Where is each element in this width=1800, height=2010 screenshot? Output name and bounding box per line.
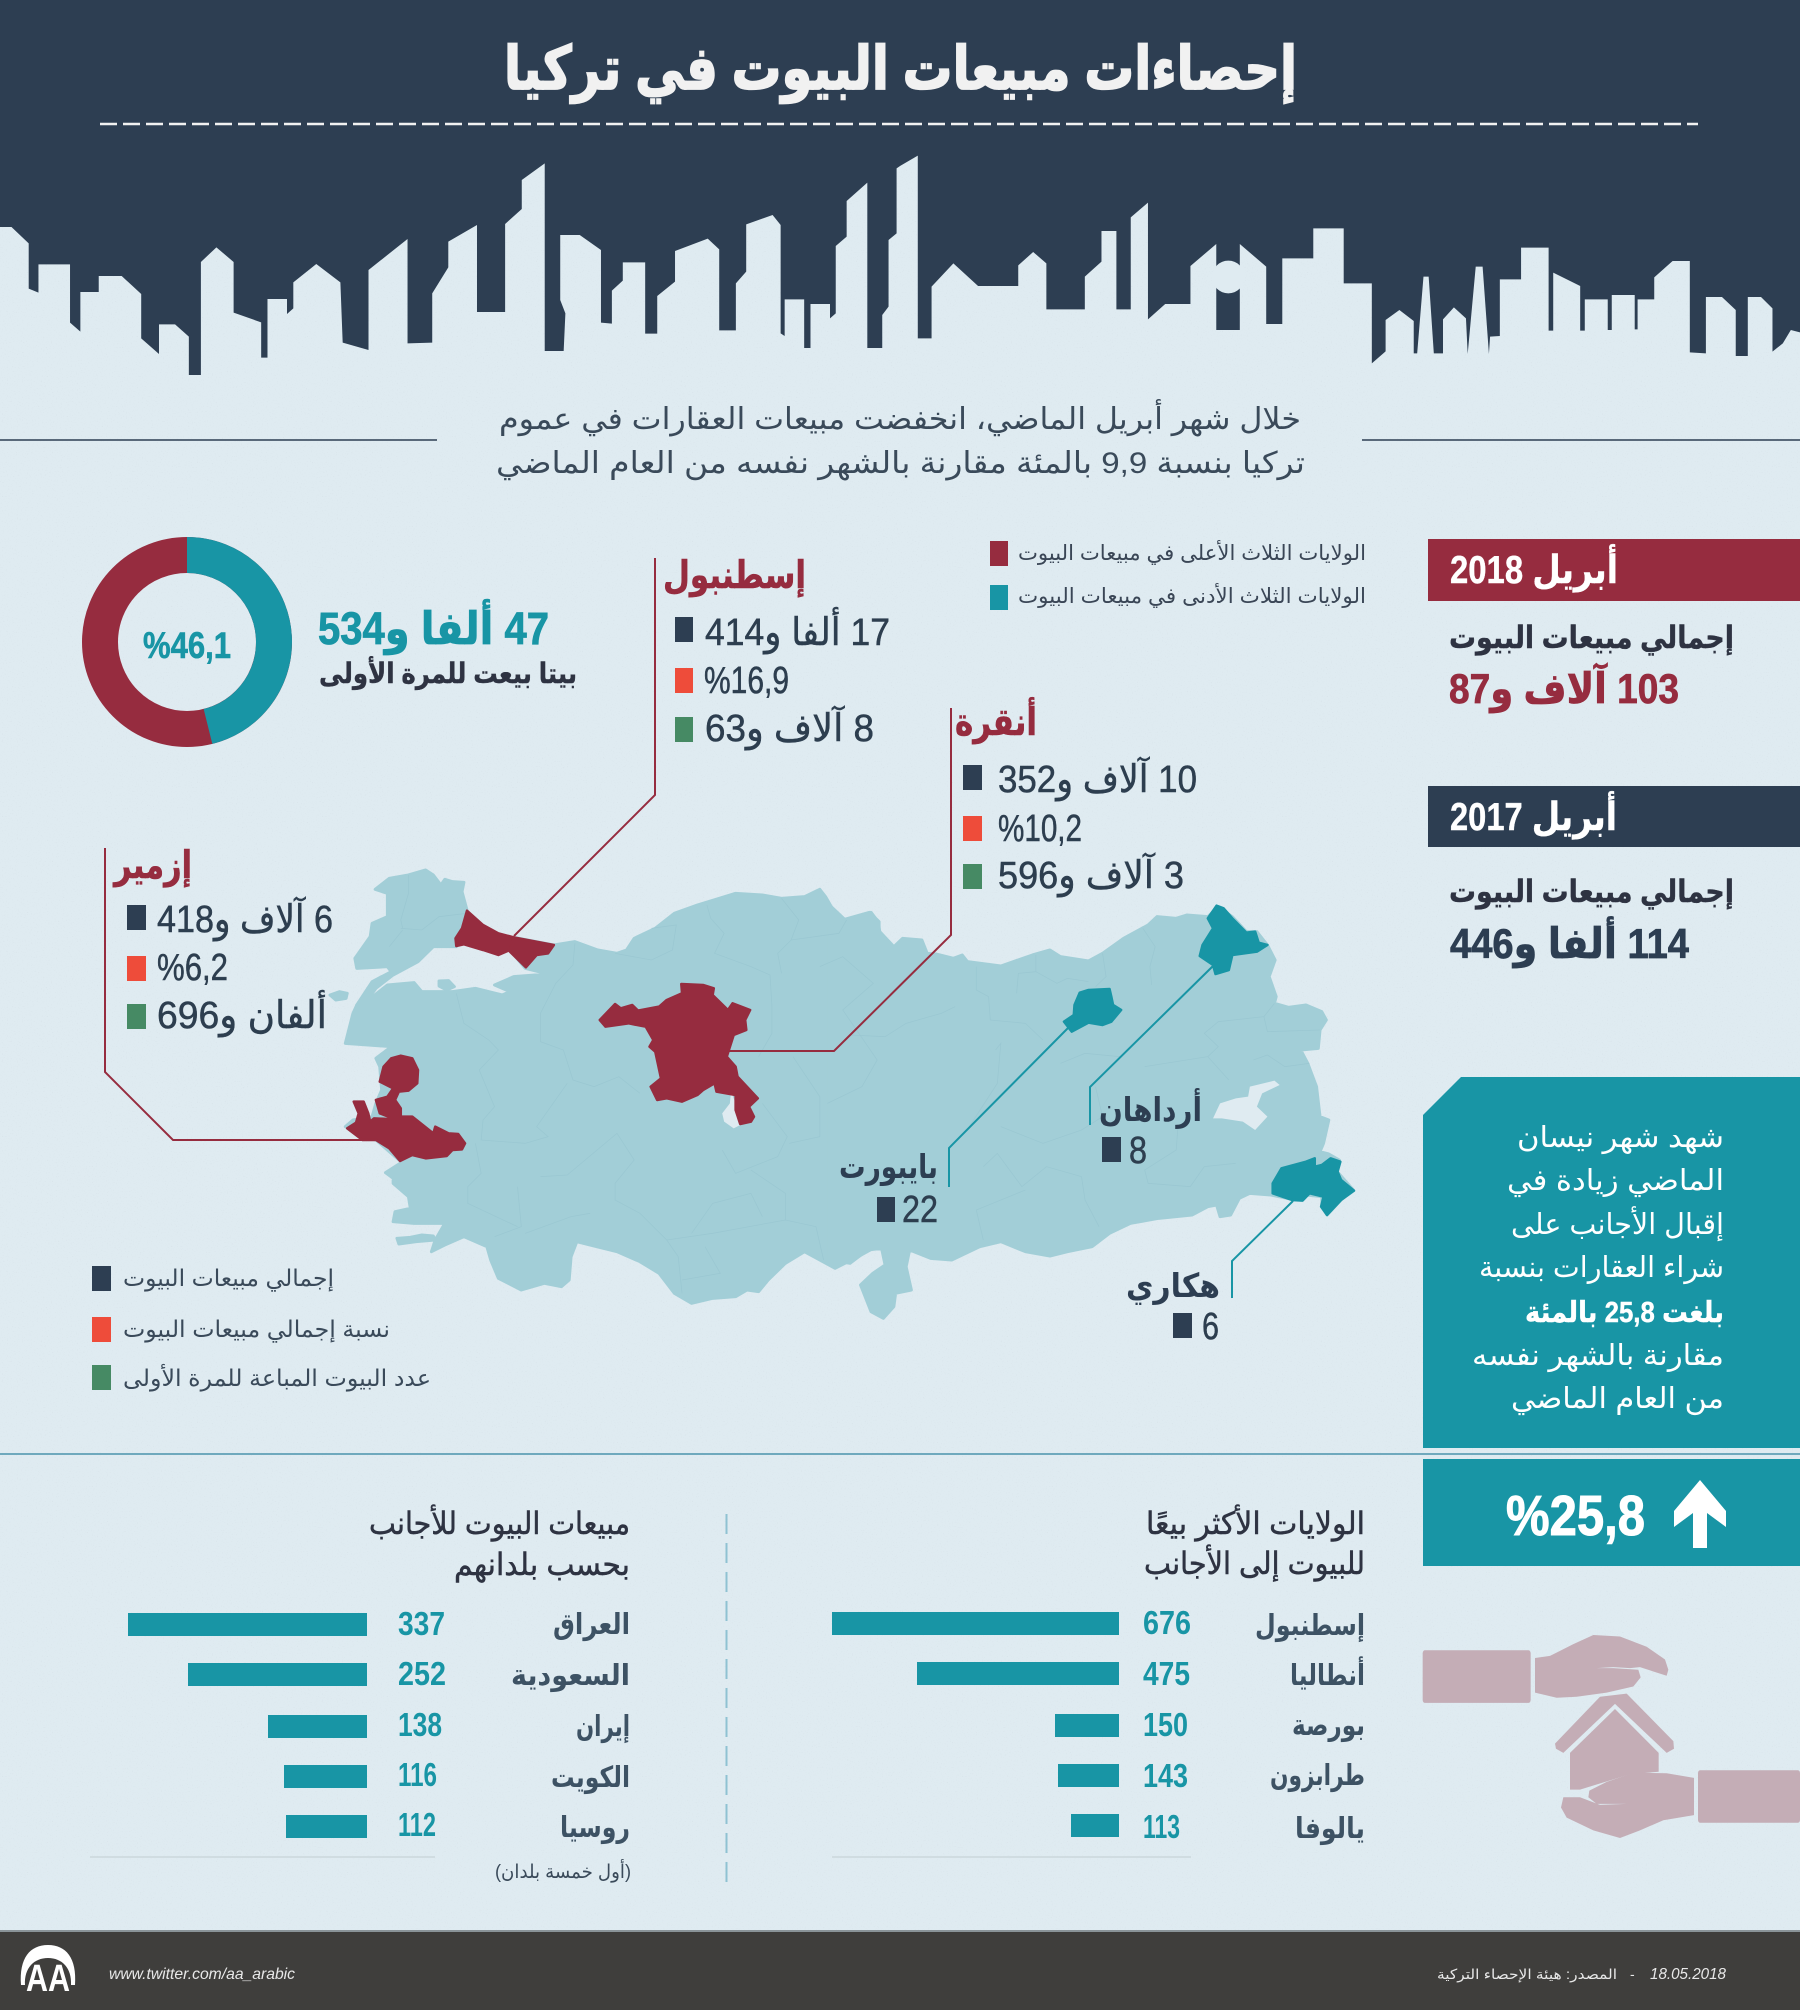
panel: foreign buyers note: من العام الماضي [1511, 1383, 1724, 1416]
callout: Bayburt [839, 1148, 938, 1231]
bar chart: foreign buyers by nationality: العراق [553, 1609, 630, 1641]
icon: up arrow [1674, 1480, 1726, 1548]
bar chart: foreign buyers by nationality: 138 [398, 1706, 442, 1743]
bar chart: foreign buyers by nationality: روسيا [560, 1812, 630, 1844]
first-time sales figure [318, 599, 577, 690]
footer: www.twitter.com/aa_arabic [109, 1966, 295, 1983]
panel: April 2018 [1428, 539, 1800, 714]
first-time sales figure: بيتا بيعت للمرة الأولى [319, 656, 577, 690]
bar chart: foreign buyers by nationality: 337 [398, 1605, 445, 1642]
panel: foreign buyers note: الماضي زيادة في [1507, 1165, 1724, 1198]
footer: - [1630, 1966, 1635, 1982]
callout: Istanbul: %16,9 [704, 660, 789, 702]
bar chart: provinces selling most to foreigners: الولايات الأكثر بيعًا [1146, 1504, 1365, 1542]
panel: foreign buyers note: إقبال الأجانب على [1511, 1205, 1724, 1242]
legend: top and bottom provinces: الولايات الثلاث الأعلى في مبيعات البيوت [1018, 540, 1366, 565]
intro text [496, 398, 1305, 481]
bar chart: provinces selling most to foreigners: بورصة [1292, 1710, 1365, 1742]
callout: Hakkari [1126, 1267, 1220, 1348]
icon: AA logo: AA [26, 1958, 70, 2000]
panel: April 2018: إجمالي مبيعات البيوت [1449, 620, 1734, 656]
callout: Izmir: إزمير [112, 845, 192, 888]
intro text: خلال شهر أبريل الماضي، انخفضت مبيعات العقارات في عموم [499, 398, 1301, 437]
callout: Izmir: %6,2 [157, 947, 228, 989]
callout: Ankara: 3 آلاف و596 [998, 852, 1184, 898]
panel: foreign buyers note: مقارنة بالشهر نفسه [1472, 1340, 1724, 1372]
legend: metrics: عدد البيوت المباعة للمرة الأولى [123, 1364, 431, 1392]
bar chart: provinces selling most to foreigners: أنطاليا [1290, 1656, 1365, 1692]
callout: Istanbul: إسطنبول [663, 555, 806, 598]
legend: top and bottom provinces: الولايات الثلاث الأدنى في مبيعات البيوت [1018, 583, 1366, 608]
panel: April 2017 [1428, 786, 1800, 969]
highlighted bottom provinces: Bayburt, Ardahan, Hakkari [1064, 906, 1354, 1215]
bar chart: foreign buyers by nationality: (أول خمسة بلدان) [495, 1859, 631, 1883]
callout: Ardahan [1099, 1088, 1202, 1172]
donut chart: first-time sales share [100, 555, 274, 729]
bar chart: provinces selling most to foreigners: 143 [1143, 1757, 1188, 1794]
panel: April 2018: أبريل 2018 [1450, 544, 1618, 593]
highlighted top provinces: Istanbul, Ankara, Izmir [347, 911, 758, 1161]
footer: المصدر: هيئة الإحصاء التركية [1437, 1966, 1617, 1983]
bar chart: provinces selling most to foreigners: 113 [1143, 1808, 1180, 1845]
callout: Izmir [112, 845, 333, 1038]
leader lines: top provinces [105, 558, 951, 1140]
callout: Ardahan: أرداهان [1099, 1088, 1202, 1129]
bar chart: foreign buyers by nationality: 112 [398, 1806, 436, 1843]
bar chart: provinces selling most to foreigners [832, 1504, 1365, 1857]
icon: AA logo [21, 1945, 75, 2000]
callout: Bayburt: 22 [902, 1189, 938, 1231]
legend: metrics: نسبة إجمالي مبيعات البيوت [123, 1316, 390, 1343]
panel: foreign buyers note: شهد شهر نيسان [1517, 1122, 1724, 1154]
callout: Bayburt: بايبورت [839, 1148, 938, 1187]
bar chart: foreign buyers by nationality: 116 [398, 1756, 437, 1793]
intro text: تركيا بنسبة 9,9 بالمئة مقارنة بالشهر نفسه من العام الماضي [496, 447, 1305, 481]
panel: April 2017: 114 ألفا و446 [1450, 916, 1690, 969]
bar chart: foreign buyers by nationality: 252 [398, 1655, 446, 1692]
bar chart: provinces selling most to foreigners: 150 [1143, 1706, 1188, 1743]
callout: Ankara [955, 697, 1197, 898]
panel: 25.8 percent increase: %25,8 [1506, 1484, 1645, 1548]
panel: 25.8 percent increase [1423, 1459, 1800, 1566]
callout: Ankara: أنقرة [955, 697, 1037, 744]
panel: April 2017: إجمالي مبيعات البيوت [1449, 874, 1734, 910]
title: إحصاءات مبيعات البيوت في تركيا [504, 35, 1297, 104]
bar chart: provinces selling most to foreigners: طرابزون [1270, 1760, 1365, 1792]
map of Turkey [330, 870, 1353, 1318]
icon: hands holding house [1423, 1635, 1800, 1838]
callout: Ankara: %10,2 [998, 808, 1082, 850]
callout: Hakkari: 6 [1202, 1306, 1219, 1348]
callout: Izmir: ألفان و696 [157, 990, 327, 1038]
bar chart: provinces selling most to foreigners: للبيوت إلى الأجانب [1144, 1544, 1365, 1582]
footer [0, 1930, 1800, 2010]
bar chart: foreign buyers by nationality: إيران [576, 1711, 630, 1744]
footer: 18.05.2018 [1650, 1966, 1726, 1983]
bar chart: provinces selling most to foreigners: يالوفا [1295, 1813, 1365, 1845]
callout: Ankara: 10 آلاف و352 [998, 756, 1197, 802]
panel: foreign buyers note: بلغت 25,8 بالمئة [1525, 1297, 1724, 1329]
header skyline [0, 0, 1800, 375]
legend: metrics: إجمالي مبيعات البيوت [123, 1265, 334, 1292]
leader lines: bottom provinces [949, 966, 1293, 1298]
callout: Ardahan: 8 [1129, 1130, 1147, 1172]
callout: Istanbul: 8 آلاف و63 [705, 705, 874, 751]
bar chart: foreign buyers by nationality: الكويت [551, 1762, 630, 1794]
panel: foreign buyers note: شراء العقارات بنسبة [1479, 1252, 1724, 1284]
bar chart: foreign buyers by nationality [90, 1504, 631, 1883]
callout: Hakkari: هكاري [1126, 1267, 1220, 1305]
donut chart: first-time sales share: %46,1 [143, 625, 231, 666]
lakes [722, 1081, 1280, 1130]
bar chart: foreign buyers by nationality: بحسب بلدانهم [454, 1547, 630, 1583]
callout: Izmir: 6 آلاف و418 [157, 896, 333, 942]
bar chart: provinces selling most to foreigners: 475 [1143, 1655, 1190, 1692]
bar chart: provinces selling most to foreigners: 676 [1143, 1604, 1191, 1641]
bar chart: foreign buyers by nationality: مبيعات البيوت للأجانب [369, 1504, 630, 1542]
panel: foreign buyers note [1423, 1077, 1800, 1448]
callout: Istanbul [663, 555, 890, 751]
panel: April 2017: أبريل 2017 [1450, 791, 1617, 840]
first-time sales figure: 47 ألفا و534 [318, 599, 549, 655]
panel: April 2018: 103 آلاف و87 [1449, 663, 1679, 714]
bar chart: foreign buyers by nationality: السعودية [511, 1660, 630, 1692]
callout: Istanbul: 17 ألفا و414 [705, 607, 890, 655]
legend: top and bottom provinces [990, 540, 1366, 610]
legend: metrics [92, 1265, 431, 1392]
bar chart: provinces selling most to foreigners: إسطنبول [1255, 1610, 1365, 1643]
